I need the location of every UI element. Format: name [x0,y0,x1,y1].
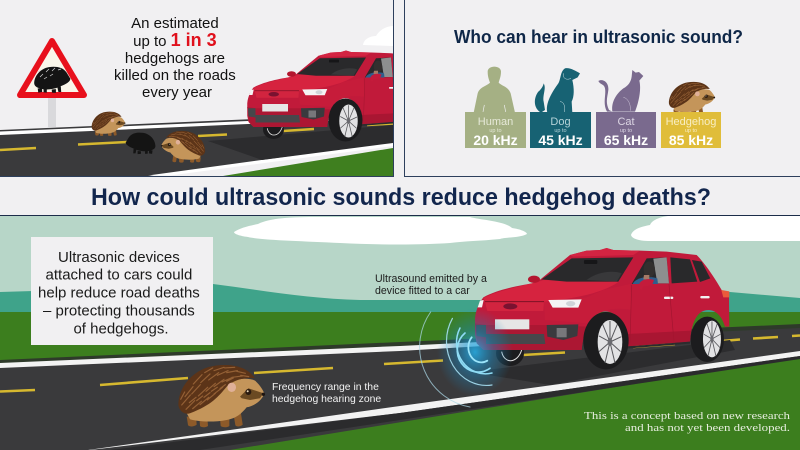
bar: hedgehog: 85 kHz [669,132,713,148]
road [0,113,393,176]
bar: cat [596,112,656,148]
lane dashes [0,336,800,392]
panel: road deaths [0,26,393,176]
label: hedgehog hearing zone: hedgehog hearing zone [272,394,381,405]
car shadow [470,340,735,385]
hills [0,284,800,314]
panel: concept scene [0,216,800,450]
concept disclaimer: This is a concept based on new research [584,410,791,422]
bar: cat: Cat [617,116,635,128]
bar: dog: 45 kHz [538,132,583,148]
hedgehog walking right [92,112,125,136]
panel heading: Who can hear in ultrasonic sound? [454,27,743,47]
panel border: road deaths [0,0,394,176]
bar: human: 20 kHz [473,132,518,148]
black hedgehog silhouette [126,133,155,154]
bar: dog [530,112,591,148]
road lower shadow [110,356,800,450]
bar: dog: up to [554,128,567,134]
cloud [363,26,393,46]
hedgehog warning sign [20,41,84,127]
statistic text: up to 1 in 3 [133,30,217,50]
bar: hedgehog [661,112,721,148]
callout: ultrasonic devices: help reduce road deaths [38,284,200,302]
road [0,327,800,450]
bar: hedgehog: Hedgehog [666,116,716,128]
label: hedgehog hearing zone: Frequency range in the [272,382,379,393]
panel border: concept scene [0,214,800,216]
statistic text: hedgehogs are [125,50,225,67]
clouds [234,216,800,244]
statistic text: killed on the roads [114,67,236,84]
bar: human [465,112,526,148]
big hedgehog [178,365,265,427]
bar: cat: 65 kHz [604,132,648,148]
panel: who can hear ultrasonic sound [404,0,800,176]
road upper shadow [0,324,800,364]
callout: ultrasonic devices: – protecting thousands [43,302,195,320]
concept disclaimer: and has not yet been developed. [625,422,790,434]
grass [0,312,800,450]
bar: human: up to [489,128,502,134]
bar: human: Human [478,116,513,128]
callout: ultrasonic devices [31,237,213,345]
label: ultrasound device: device fitted to a car [375,285,470,297]
red car [247,50,393,142]
dog silhouette [535,68,580,113]
grass [223,148,393,176]
statistic text: every year [142,84,212,101]
statistic text: An estimated [131,15,219,32]
cat silhouette [598,70,643,112]
callout: ultrasonic devices: of hedgehogs. [73,320,169,338]
lane dashes [0,124,393,150]
road white edge lines [0,341,800,450]
sky [0,216,800,300]
car shadow [208,125,393,160]
ultrasound waves [420,308,513,407]
callout: ultrasonic devices: attached to cars could [46,266,192,284]
concept disclaimer [584,412,790,434]
big red car [475,248,729,369]
callout: ultrasonic devices: Ultrasonic devices [58,249,180,266]
hedgehog walking left [161,131,205,163]
bar: cat: up to [620,128,632,134]
main heading: How could ultrasonic sounds reduce hedgehog deaths? [91,184,711,211]
human silhouette [474,67,515,113]
road white edge lines [0,115,393,176]
bar: hedgehog: up to [685,128,697,134]
hedgehog on bar [669,82,715,115]
bar: dog: Dog [550,116,571,128]
label: ultrasound device: Ultrasound emitted by a [375,273,487,285]
